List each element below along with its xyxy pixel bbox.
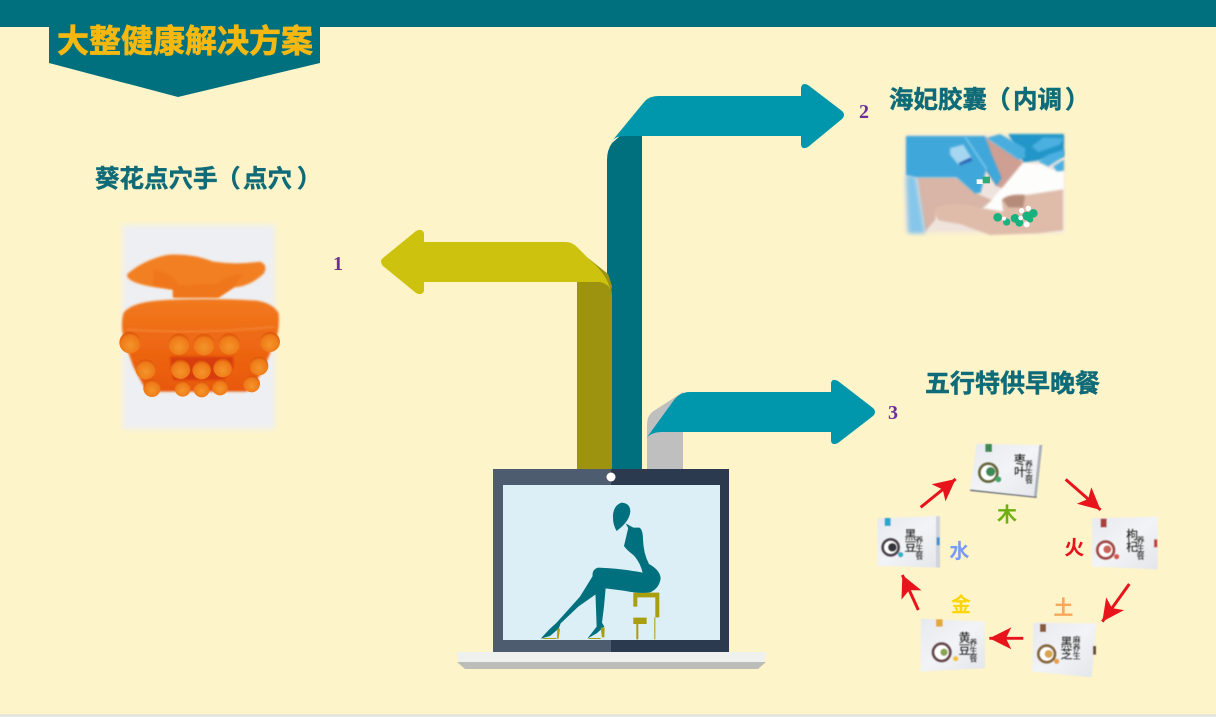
laptop base shadow xyxy=(457,662,766,669)
product box: 木: 枣叶 xyxy=(1012,452,1026,478)
product box: 金: 黄豆 xyxy=(957,630,971,656)
heading: 葵花点穴手: ） xyxy=(297,165,322,193)
five elements product cycle xyxy=(877,444,1158,677)
gloved hand left xyxy=(906,136,1002,193)
label 金: 金 xyxy=(951,592,971,616)
stool xyxy=(633,593,659,639)
thumb shadow xyxy=(1003,195,1025,207)
heading: 五行特供早晚餐: 五行特供早晚餐 xyxy=(925,370,1100,398)
product box: 火: 养生餐 xyxy=(1136,535,1145,561)
open palm xyxy=(935,189,1063,235)
massager body xyxy=(122,299,279,392)
label 木: 木 xyxy=(997,503,1017,526)
label 水: 水 xyxy=(949,540,969,563)
dark area between beads xyxy=(170,357,233,380)
glove right finger two xyxy=(1038,150,1064,166)
arrow 1 head and shaft xyxy=(381,230,611,294)
laptop frame left xyxy=(493,469,611,652)
product box: 金 xyxy=(921,619,985,672)
finger crease xyxy=(965,137,987,169)
patient arm xyxy=(917,177,992,232)
laptop screen xyxy=(503,485,720,640)
shoe heels xyxy=(543,628,605,639)
ribbon arrow 1: olive yellow xyxy=(381,230,612,469)
number 1: 1 xyxy=(333,253,343,275)
bottom edge line xyxy=(0,714,1216,717)
skin between fingers xyxy=(985,137,1023,188)
arrow 2 head and shaft xyxy=(612,84,844,148)
arrow 3 head and shaft xyxy=(645,380,875,444)
white background area xyxy=(983,163,1064,232)
product box: 火: 枸杞 xyxy=(1125,527,1139,553)
product box: 木 xyxy=(970,444,1042,498)
heading: 海妃胶囊: 内调 xyxy=(1013,86,1062,114)
head xyxy=(613,503,630,531)
laptop frame right xyxy=(611,469,729,652)
heading: 海妃胶囊: 海妃胶囊 xyxy=(889,87,987,114)
glove right finger one xyxy=(1032,137,1064,152)
deep blue glove behind xyxy=(1008,134,1064,163)
image: gloved hands with capsules xyxy=(905,134,1064,235)
massager handle xyxy=(127,255,265,297)
fingernail highlight xyxy=(950,145,972,165)
glove right finger three xyxy=(1053,160,1064,171)
blue sleeve xyxy=(906,175,925,233)
title text: 大整健康解决方案 xyxy=(57,23,313,59)
camera dot xyxy=(606,472,616,482)
arrow 1 fold xyxy=(588,258,612,292)
product box: 土: 麻养生 xyxy=(1072,634,1081,659)
handle shade xyxy=(153,269,243,297)
top bar xyxy=(0,0,1216,27)
heading: 葵花点穴手: 点穴 xyxy=(243,165,292,193)
laptop base xyxy=(457,652,766,662)
label 火: 火 xyxy=(1064,538,1084,560)
heading: 葵花点穴手: （ xyxy=(216,165,240,193)
ribbon arrow 2: teal xyxy=(607,84,844,469)
heading: 葵花点穴手: 葵花点穴手 xyxy=(95,166,218,193)
product box: 水: 养生餐 xyxy=(915,535,924,561)
neck xyxy=(626,523,634,531)
image: orange acupoint massager xyxy=(119,225,280,429)
heading: 海妃胶囊: （ xyxy=(986,86,1010,114)
product box: 金: 养生餐 xyxy=(969,637,978,663)
title banner xyxy=(49,23,320,97)
product box: 土 xyxy=(1032,623,1097,677)
number 2: 2 xyxy=(859,101,869,123)
product box: 水 xyxy=(877,516,940,568)
label 土: 土 xyxy=(1053,596,1073,619)
seated figure on stool xyxy=(541,503,661,639)
front leg xyxy=(541,575,607,639)
number 3: 3 xyxy=(888,402,898,424)
laptop xyxy=(457,469,766,669)
capsules xyxy=(977,177,1038,227)
massager bead rows xyxy=(119,332,280,397)
cycle arrows xyxy=(902,479,1129,638)
heading: 海妃胶囊: ） xyxy=(1065,86,1090,114)
product box: 木: 养生餐 xyxy=(1024,459,1033,485)
ribbon arrow 3: grey to teal xyxy=(645,380,875,469)
blue spot on finger xyxy=(959,157,972,165)
product box: 火 xyxy=(1092,517,1158,569)
body ledge highlight xyxy=(127,327,275,332)
product box: 土: 黑芝 xyxy=(1059,636,1073,661)
torso and seat xyxy=(593,528,661,593)
glove finger top xyxy=(987,134,1025,160)
product box: 水: 黑豆 xyxy=(903,528,917,553)
rear leg xyxy=(587,588,606,639)
